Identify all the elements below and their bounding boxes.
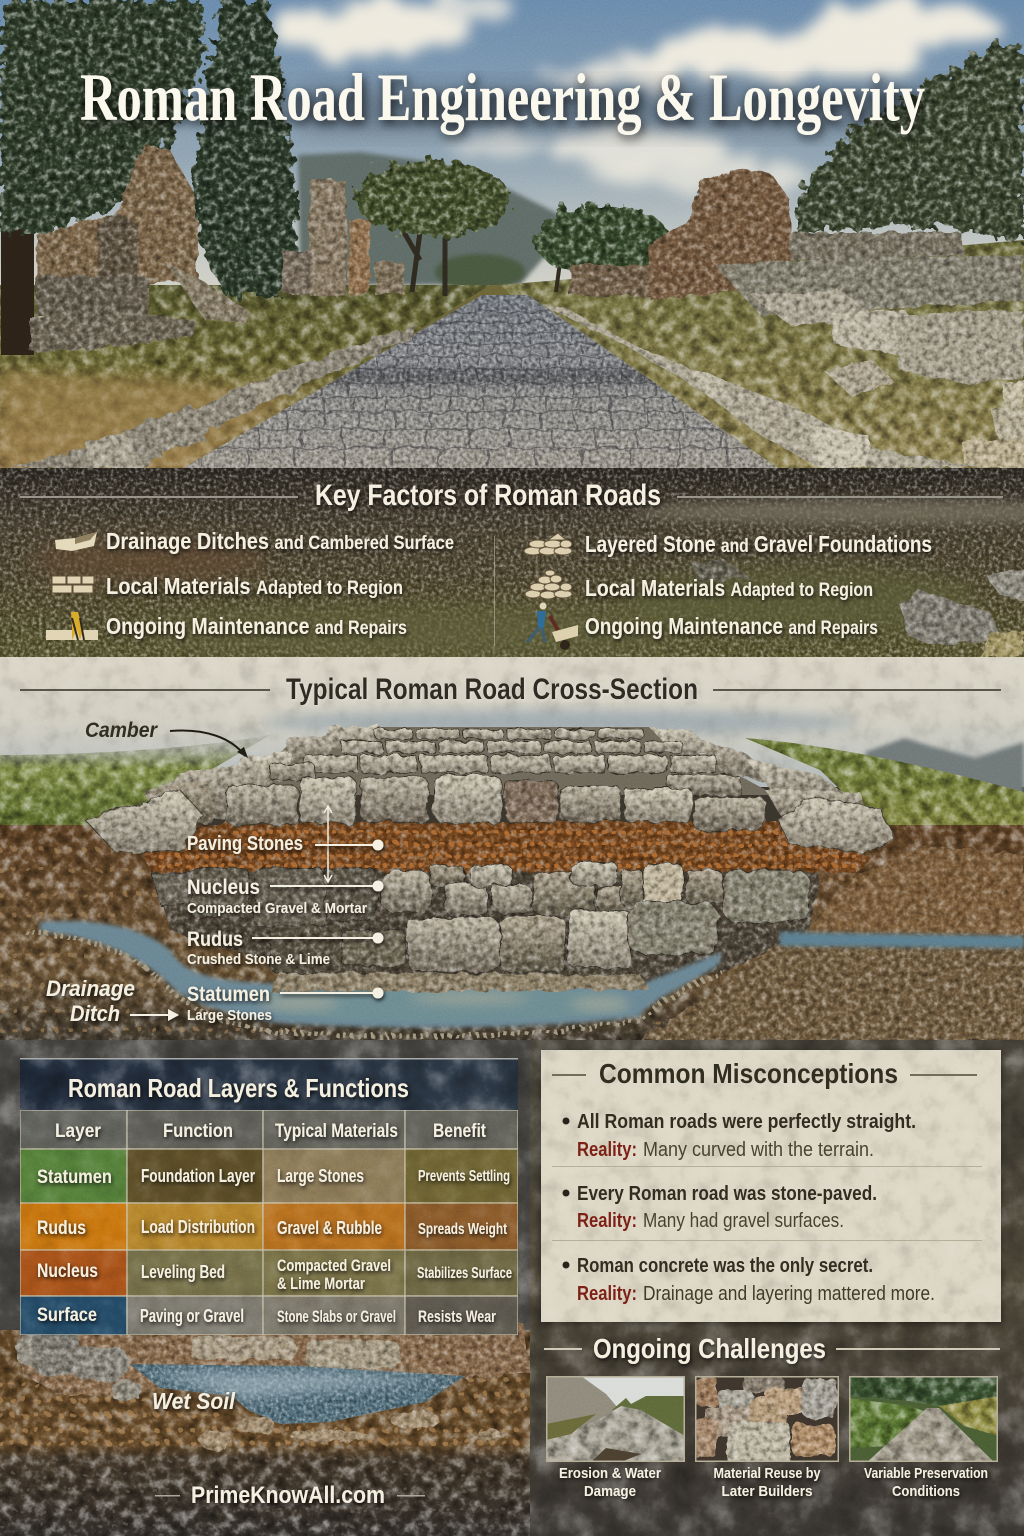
row: statumen: Statumen	[37, 1167, 112, 1188]
icon: layered stones	[524, 533, 572, 555]
panel: layers table	[20, 1058, 518, 1335]
label: rudus: Crushed Stone & Lime	[187, 951, 330, 968]
misconception 3: Roman concrete was the only secret.	[577, 1255, 873, 1277]
icon: cambered stone	[55, 532, 97, 551]
foundation backing	[150, 868, 820, 985]
label: nucleus: Nucleus	[187, 876, 260, 899]
item divider	[552, 1240, 982, 1241]
heading rule left	[20, 496, 298, 498]
left ruins	[30, 145, 250, 352]
right road curb	[542, 305, 985, 468]
row: rudus: Rudus	[37, 1218, 86, 1239]
heading rule right	[910, 1074, 977, 1076]
panel: key factors	[0, 468, 1024, 657]
misconception 3: Drainage and layering mattered more.	[643, 1283, 935, 1305]
parchment and sky	[0, 657, 1024, 787]
table top edge	[20, 1058, 518, 1060]
right soil bank	[800, 845, 1024, 935]
left dark grey edge	[0, 1040, 530, 1340]
heading rule right	[713, 689, 1001, 691]
title shadow band	[300, 88, 940, 130]
icon: worker with barrow	[527, 602, 578, 650]
cypress tree	[195, 0, 298, 296]
left ground	[0, 285, 490, 468]
right trees	[795, 45, 1024, 245]
panel: common misconceptions	[541, 1050, 1001, 1322]
heading: Ongoing Challenges	[593, 1333, 826, 1364]
label: nucleus: Compacted Gravel & Mortar	[187, 900, 367, 917]
distant hills	[298, 152, 575, 285]
callout: camber: Camber	[85, 719, 159, 742]
heading rule right	[677, 496, 1003, 498]
height arrow	[324, 806, 332, 882]
stone texture ground	[0, 1040, 1024, 1536]
icon: stone pile	[525, 570, 572, 599]
misconception 2	[562, 1183, 877, 1232]
row: statumen	[37, 1166, 510, 1188]
left boulders	[16, 1330, 400, 1400]
soil specks	[0, 850, 1024, 1030]
icon: worker on stone	[46, 612, 98, 640]
table header text: Benefit	[433, 1121, 487, 1142]
left curb stones	[145, 725, 380, 825]
table title: Roman Road Layers & Functions	[68, 1073, 409, 1103]
caption: preservation	[864, 1465, 988, 1500]
factor: maintenance left: Ongoing Maintenance and Repairs	[106, 613, 407, 639]
icon: cut stone blocks	[52, 576, 94, 593]
paving joints	[150, 312, 800, 458]
mountains	[865, 738, 1024, 795]
panel: cross-section	[0, 657, 1024, 1040]
left big tree	[0, 0, 205, 355]
row: nucleus: & Lime Mortar	[277, 1274, 365, 1293]
row: rudus	[37, 1217, 507, 1239]
heading: Typical Roman Road Cross-Section	[286, 673, 698, 706]
misty blue sky	[260, 710, 860, 734]
caption: reuse	[714, 1465, 821, 1500]
label: statumen: Statumen	[187, 983, 270, 1006]
panel: hero photo of Roman road	[0, 0, 1024, 468]
ruined columns	[282, 180, 404, 296]
callout: camber	[85, 719, 248, 758]
dark grit	[0, 1460, 530, 1525]
misconception 2: Every Roman road was stone-paved.	[577, 1183, 877, 1205]
label: statumen: Large Stones	[187, 1007, 272, 1024]
grass left	[0, 735, 270, 830]
panel: lower background	[0, 1040, 1024, 1536]
heading: Key Factors of Roman Roads	[315, 479, 661, 512]
label: rudus	[187, 928, 384, 968]
rubble bank	[15, 1322, 530, 1395]
heading rule left	[20, 689, 270, 691]
row: statumen: Large Stones	[277, 1166, 364, 1186]
misconception 1: Many curved with the terrain.	[643, 1139, 874, 1161]
table header text	[55, 1121, 487, 1142]
caption: preservation: Variable Preservation	[864, 1465, 988, 1482]
wet soil ground	[0, 1330, 530, 1536]
row: rudus: Load Distribution	[141, 1217, 255, 1237]
field boulders	[690, 560, 1024, 657]
heading: Common Misconceptions	[599, 1058, 898, 1089]
table header text: Layer	[55, 1121, 102, 1142]
far horizon trees	[435, 254, 525, 290]
callout: drainage ditch: Ditch	[70, 1001, 120, 1026]
photo: variable preservation	[849, 1376, 998, 1462]
column divider	[494, 536, 495, 646]
table title bar	[20, 1058, 518, 1110]
road surface	[225, 727, 775, 795]
heading rule left	[544, 1348, 582, 1350]
lower right soil	[640, 945, 1024, 1040]
item divider	[552, 1166, 982, 1167]
sky	[0, 0, 1024, 310]
water pool	[130, 1364, 465, 1424]
photo: erosion	[546, 1376, 685, 1462]
label: statumen	[187, 983, 384, 1024]
clouds	[270, 0, 1000, 191]
misconception 2: Many had gravel surfaces.	[643, 1210, 844, 1232]
callout: drainage ditch	[46, 976, 179, 1026]
factor: layered stone: Layered Stone and Gravel Foundations	[585, 531, 932, 557]
caption: erosion: Damage	[584, 1483, 636, 1500]
misconception 2: Reality:	[577, 1210, 637, 1232]
caption: erosion	[559, 1465, 661, 1500]
table header text: Typical Materials	[275, 1121, 398, 1142]
row: nucleus: Compacted Gravel	[277, 1256, 391, 1275]
grass right	[745, 738, 1024, 860]
ground underlay	[0, 285, 1024, 468]
key factors background	[0, 468, 1024, 657]
row: nucleus: Leveling Bed	[141, 1262, 225, 1282]
card shadow	[541, 1050, 1001, 1322]
label: wet soil: Wet Soil	[152, 1388, 236, 1414]
row: nucleus: Stabilizes Surface	[417, 1265, 512, 1282]
factor: local materials right: Local Materials Adapted to Region	[585, 575, 873, 601]
photo: reused stones	[695, 1376, 839, 1462]
table cells	[20, 1110, 518, 1335]
panel: ongoing challenges	[544, 1333, 1000, 1500]
table header text: Function	[163, 1121, 233, 1142]
row: surface: Resists Wear	[418, 1307, 496, 1326]
misconception 1: Reality:	[577, 1139, 637, 1161]
right curb stones	[650, 728, 868, 822]
misconception 1: All Roman roads were perfectly straight.	[577, 1111, 916, 1133]
heading rule right	[836, 1348, 1000, 1350]
factor: local materials left: Local Materials Adapted to Region	[106, 573, 403, 599]
gravel specks	[160, 832, 860, 866]
right ruin	[570, 168, 965, 300]
soil grit	[0, 1380, 530, 1443]
caption: preservation: Conditions	[892, 1483, 960, 1500]
row: surface: Paving or Gravel	[140, 1306, 244, 1326]
paving stones	[85, 729, 895, 852]
misconception 3	[562, 1255, 935, 1305]
row: surface	[37, 1305, 496, 1326]
sunlit grass tan	[0, 370, 290, 468]
row: statumen: Prevents Settling	[418, 1168, 510, 1185]
gravel layer	[140, 822, 872, 872]
caption: reuse: Material Reuse by	[714, 1465, 821, 1482]
row: nucleus: Nucleus	[37, 1261, 98, 1282]
grassy field tones	[30, 540, 980, 654]
misconception 1	[562, 1111, 916, 1161]
row: surface: Stone Slabs or Gravel	[277, 1307, 396, 1326]
paved road	[183, 295, 778, 468]
pool highlight	[150, 1372, 450, 1400]
factor: maintenance right: Ongoing Maintenance and Repairs	[585, 613, 878, 639]
misconception 3: Reality:	[577, 1283, 637, 1305]
umbrella pines	[354, 160, 670, 296]
row: nucleus	[37, 1256, 512, 1293]
caption: erosion: Erosion & Water	[559, 1465, 661, 1482]
parchment card	[541, 1050, 1001, 1322]
ditch gravel edge	[25, 932, 722, 1036]
scattered pebbles	[199, 1411, 502, 1450]
row: rudus: Gravel & Rubble	[277, 1218, 382, 1238]
pool foam and gravel	[260, 993, 630, 1010]
row: surface: Surface	[37, 1305, 97, 1326]
site credit: PrimeKnowAll.com	[191, 1482, 385, 1509]
right stone field	[715, 255, 1024, 468]
ditch water	[40, 921, 1024, 1027]
factor: drainage: Drainage Ditches and Cambered Surface	[106, 528, 454, 554]
row: statumen: Foundation Layer	[141, 1166, 255, 1186]
gravel bed	[270, 972, 650, 992]
foundation stones	[152, 862, 810, 973]
row: rudus: Spreads Weight	[418, 1221, 507, 1238]
heading rule left	[552, 1074, 586, 1076]
callout: drainage ditch: Drainage	[46, 976, 135, 1001]
caption: reuse: Later Builders	[722, 1483, 812, 1500]
right ground	[500, 240, 1024, 468]
left road curb	[8, 325, 415, 468]
soil	[0, 825, 1024, 1040]
label: paving stones: Paving Stones	[187, 833, 303, 855]
lighter horizon glow	[630, 500, 1024, 524]
label: nucleus	[187, 876, 384, 917]
label: rudus: Rudus	[187, 928, 243, 951]
